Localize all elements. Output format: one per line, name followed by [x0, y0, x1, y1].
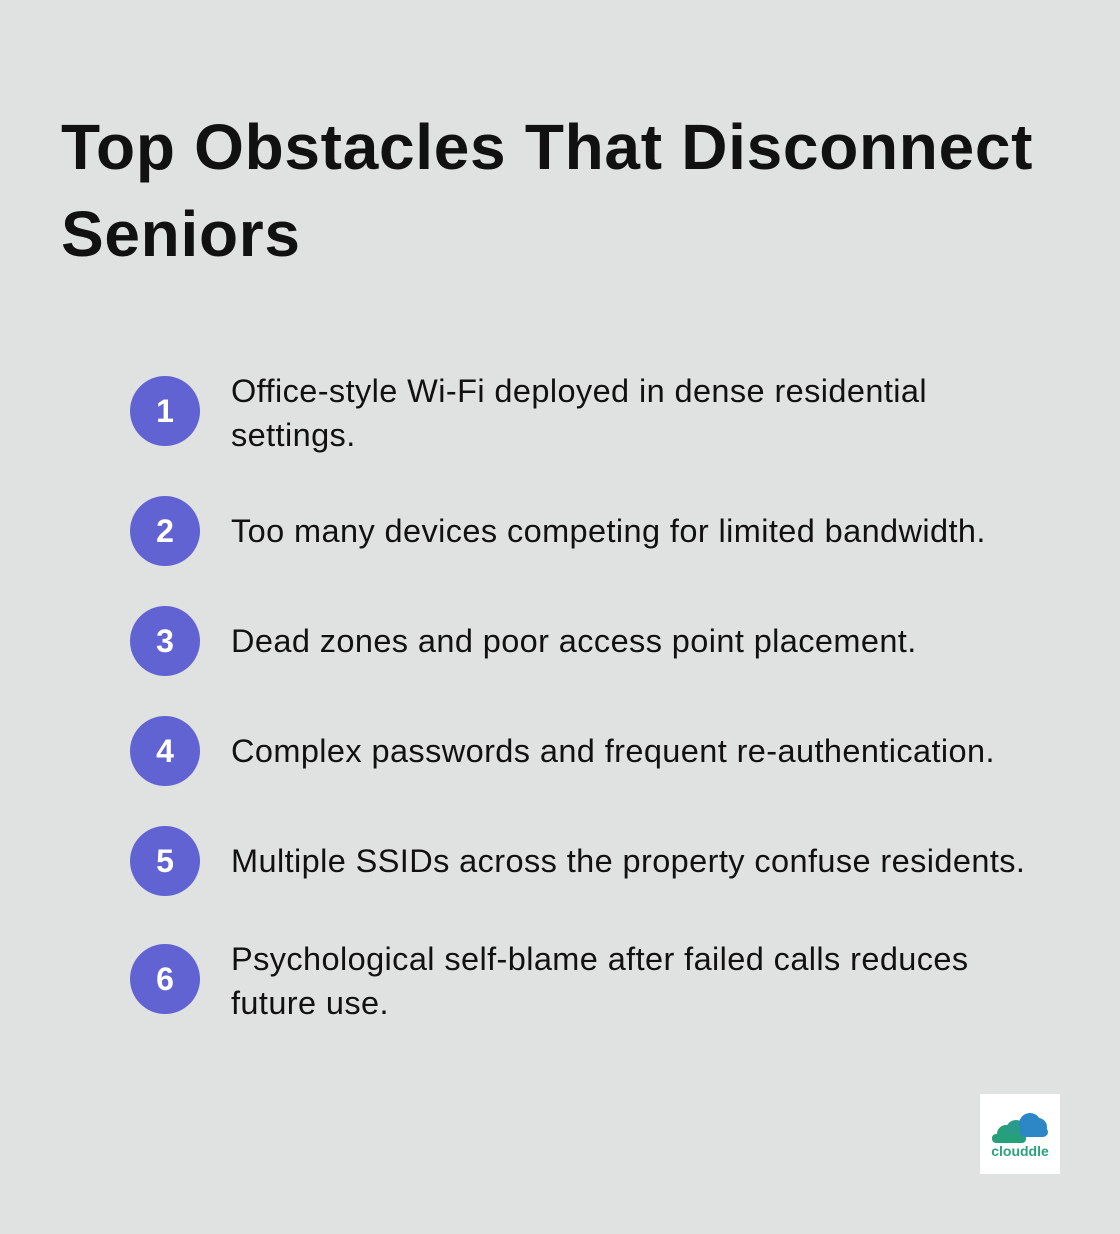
item 4: Complex passwords and frequent re-authentication.: [231, 733, 995, 769]
item 6: 6: [156, 961, 174, 997]
item 6: [130, 941, 969, 1021]
item 6: future use.: [231, 985, 389, 1021]
item 1: settings.: [231, 417, 356, 453]
item 6: Psychological self-blame after failed calls reduces: [231, 941, 969, 977]
logo: clouddle: [991, 1143, 1049, 1159]
item 3: Dead zones and poor access point placement.: [231, 623, 917, 659]
item 3: 3: [156, 623, 174, 659]
item 5: Multiple SSIDs across the property confuse residents.: [231, 843, 1025, 879]
item 2: [130, 496, 986, 566]
item 2: Too many devices competing for limited bandwidth.: [231, 513, 986, 549]
item 4: [130, 716, 995, 786]
item 5: [130, 826, 1025, 896]
title: Top Obstacles That Disconnect Seniors: [61, 111, 1033, 270]
logo: [980, 1094, 1060, 1174]
item 4: 4: [156, 733, 174, 769]
item 1: Office-style Wi-Fi deployed in dense residential: [231, 373, 927, 409]
item 2: 2: [156, 513, 174, 549]
item 1: [130, 373, 927, 453]
item 1: 1: [156, 393, 174, 429]
item 5: 5: [156, 843, 174, 879]
item 3: [130, 606, 917, 676]
